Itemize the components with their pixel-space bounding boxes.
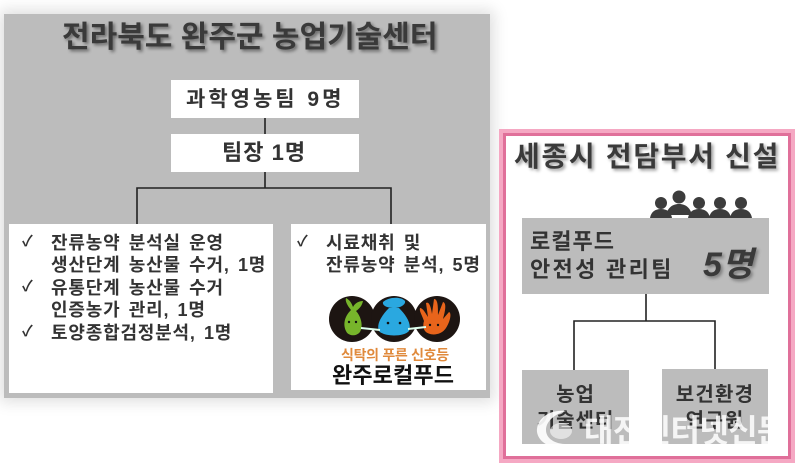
- box: team leader: [171, 134, 359, 172]
- text: distribution duty: 유통단계 농산물 수거: [51, 278, 224, 298]
- icon: logo characters: [329, 296, 460, 342]
- check mark 2: ✓: [22, 278, 33, 295]
- box: local food safety team: [522, 218, 769, 294]
- check mark 3: ✓: [22, 323, 33, 340]
- text: logo slogan: 식탁의 푸른 신호등: [341, 347, 449, 363]
- text: team name: 로컬푸드: [530, 229, 615, 254]
- watermark: [536, 410, 786, 449]
- box: science farming team: [171, 80, 359, 118]
- text: watermark name: 대전인터넷신문: [584, 413, 786, 449]
- panel: Wanju agricultural technology center: [4, 14, 490, 398]
- text: logo name: 완주로컬푸드: [332, 363, 454, 388]
- text: five people: 5명: [703, 246, 753, 284]
- panel: Sejong dedicated department: [499, 129, 795, 463]
- box: right duties and logo: [291, 224, 486, 390]
- text: distribution duty: [51, 278, 224, 320]
- box: agricultural center: [522, 370, 629, 444]
- heading: Wanju center: 전라북도 완주군 농업기술센터: [62, 21, 437, 54]
- text: agricultural center: [537, 384, 614, 432]
- text: pesticide lab duty: [51, 233, 266, 275]
- text: health institute: 보건환경: [676, 384, 754, 406]
- heading: Sejong: 세종시 전담부서 신설: [514, 141, 780, 172]
- text: health institute: [676, 384, 754, 432]
- text: team name: [530, 229, 674, 282]
- text: sampling duty: [326, 233, 481, 275]
- icon: watermark logo: [536, 410, 572, 444]
- text: team name: 안전성 관리팀: [530, 257, 674, 282]
- text: agricultural center: 농업: [556, 384, 595, 406]
- text: sampling duty: 잔류농약 분석, 5명: [326, 255, 481, 275]
- text: team leader: 팀장 1명: [222, 140, 306, 165]
- org chart connectors: [573, 294, 716, 370]
- check mark: ✓: [297, 233, 308, 250]
- text: distribution duty: 인증농가 관리, 1명: [51, 300, 206, 320]
- check mark 1: ✓: [22, 233, 33, 250]
- icon: group of five people: [650, 190, 752, 218]
- text: soil analysis duty: 토양종합검정분석, 1명: [51, 323, 232, 343]
- text: agricultural center: 기술센터: [537, 410, 614, 432]
- org chart connectors: [136, 118, 392, 224]
- text: pesticide lab duty: 생산단계 농산물 수거, 1명: [51, 255, 266, 275]
- text: pesticide lab duty: 잔류농약 분석실 운영: [51, 233, 224, 253]
- box: health and environment institute: [662, 369, 768, 444]
- text: health institute: 연구원: [686, 410, 744, 432]
- box: left duties list: [9, 224, 273, 393]
- text: team size: 과학영농팀 9명: [186, 88, 344, 111]
- text: sampling duty: 시료채취 및: [326, 233, 421, 253]
